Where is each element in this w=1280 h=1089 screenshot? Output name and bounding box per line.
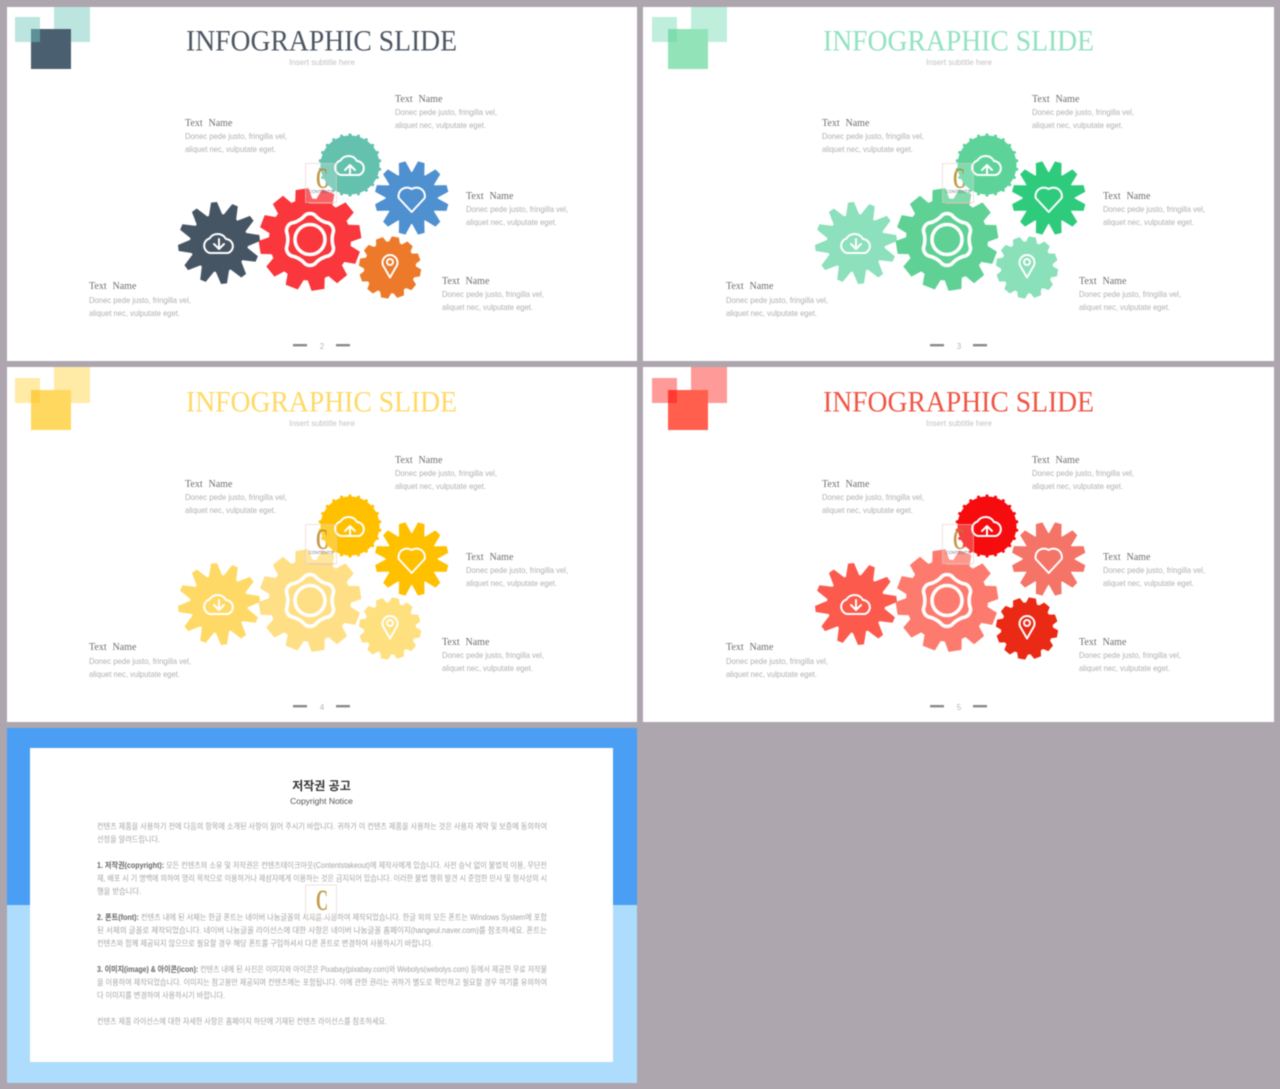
text block: top right: aliquet nec, vulputate eget. (1032, 120, 1123, 130)
text block: top right (1032, 455, 1134, 491)
text block: lower right (442, 637, 544, 673)
text block: top left: Donec pede justo, fringilla vel, (822, 131, 924, 141)
notice section 3: 3. 이미지(image) & 아이콘(icon): 컨텐츠 내에 된 사진은 이미지와 아이콘은 Pixabay(pixabay.com)와 Webolys(webolys.com) 등에서 제공한 무료 저작물 (97, 964, 547, 974)
notice heading: 저작권 공고 (292, 778, 351, 793)
text block: lower right: Donec pede justo, fringilla vel, (1079, 289, 1181, 299)
notice section 3: 을 이용하여 제작되었습니다. 이미지는 참고용만 제공되며 컨텐츠에는 포함됩니다. 이에 관한 권리는 귀하가 별도로 확인하고 필요할 경우 여기를 유의하여 (97, 977, 547, 987)
gear: download (173, 558, 265, 650)
watermark: C (953, 162, 965, 195)
text block: top right: Text Name (1032, 94, 1080, 105)
subtitle: Insert subtitle here (926, 419, 992, 428)
text block: top right (1032, 94, 1134, 130)
text block: lower left (89, 281, 191, 318)
text block: lower left: Text Name (726, 642, 774, 653)
text block: right: aliquet nec, vulputate eget. (1103, 578, 1194, 588)
text block: top left: Text Name (822, 479, 870, 490)
text block: top left: Donec pede justo, fringilla vel, (822, 492, 924, 502)
text block: right: Donec pede justo, fringilla vel, (466, 204, 568, 214)
text block: lower right: aliquet nec, vulputate eget. (442, 663, 533, 673)
text block: right: Donec pede justo, fringilla vel, (1103, 565, 1205, 575)
gear: upload (956, 494, 1018, 558)
panel: slide 3 green theme (643, 7, 1274, 361)
gear: settings (252, 542, 368, 659)
subtitle: Insert subtitle here (289, 58, 355, 67)
watermark (942, 162, 974, 204)
text block: right: Text Name (1103, 552, 1151, 563)
watermark: C (316, 162, 328, 195)
gear: pin (991, 232, 1063, 303)
text block: lower left: Donec pede justo, fringilla vel, (89, 295, 191, 305)
text block: right (466, 191, 568, 227)
text block: top left: Donec pede justo, fringilla vel, (185, 131, 287, 141)
gear: heart (366, 153, 457, 243)
text block: right: aliquet nec, vulputate eget. (466, 578, 557, 588)
notice section 1 (97, 860, 547, 896)
title: INFOGRAPHIC SLIDE (823, 386, 1094, 418)
gear: heart (366, 514, 457, 604)
watermark: CONTENTS (309, 550, 333, 555)
text block: top left (822, 118, 924, 154)
text block: top left: aliquet nec, vulputate eget. (822, 144, 913, 154)
notice intro (97, 821, 547, 844)
text block: lower right: aliquet nec, vulputate eget. (1079, 302, 1170, 312)
notice section 1: 재, 배포 시 기 명백에 의하여 영리 목적으로 이용하거나 제삼자에게 이용하는 것은 금지되어 있습니다. 이러한 불법 행위 발견 시 준엄한 민사 및 형사상의 시 (97, 873, 547, 883)
text block: right: Donec pede justo, fringilla vel, (1103, 204, 1205, 214)
text block: top right: Donec pede justo, fringilla vel, (1032, 468, 1134, 478)
pagination: 3 (957, 342, 962, 351)
gear: upload (319, 494, 381, 558)
text block: right (1103, 552, 1205, 588)
text block: top right: Donec pede justo, fringilla vel, (395, 468, 497, 478)
gear: heart (1003, 514, 1094, 604)
pagination (930, 703, 987, 712)
notice footer: 컨텐츠 제품 라이선스에 대한 자세한 사항은 홈페이지 하단에 기재된 컨텐츠 라이선스를 참조하세요. (97, 1016, 387, 1026)
text block: lower right: Donec pede justo, fringilla vel, (442, 289, 544, 299)
watermark (306, 884, 336, 919)
pagination (293, 703, 350, 712)
text block: lower right: aliquet nec, vulputate eget. (1079, 663, 1170, 673)
watermark: CONTENTS (309, 189, 333, 194)
watermark: CONTENTS (946, 189, 970, 194)
title: INFOGRAPHIC SLIDE (823, 24, 1094, 58)
text block: top left: Text Name (822, 118, 870, 129)
notice section 1: 1. 저작권(copyright): 모든 컨텐츠의 소유 및 저작권은 컨텐츠테이크아웃(Contentstakeout)에 제작사에게 있습니다. 사전 승낙 없이 불법적 이용, 무단전 (97, 860, 547, 870)
text block: lower right (1079, 276, 1181, 312)
gear: upload (319, 134, 381, 196)
text block: top right: aliquet nec, vulputate eget. (395, 481, 486, 491)
text block: top right: Text Name (1032, 455, 1080, 466)
text block: lower right: Text Name (1079, 276, 1127, 287)
text block: top right: aliquet nec, vulputate eget. (395, 120, 486, 130)
text block: lower left: Text Name (89, 281, 137, 292)
watermark (306, 162, 336, 204)
watermark: C (953, 523, 965, 556)
text block: lower right (442, 276, 544, 312)
text block: top left: aliquet nec, vulputate eget. (822, 505, 913, 515)
panel: slide 2 dark theme (7, 7, 637, 361)
pagination: 4 (320, 703, 325, 712)
notice section 2: 컨텐츠와 함께 제공되지 않으므로 필요할 경우 해당 폰트를 구입하셔서 다른 폰트로 변경하여 사용하시기 바랍니다. (97, 938, 433, 948)
notice intro: 컨텐츠 제품을 사용하기 전에 다음의 항목에 소개된 사항이 읽어 주시기 바랍니다. 귀하가 이 컨텐츠 제품을 사용하는 것은 사용자 계약 및 보증에 동의하여 (97, 821, 547, 831)
gear: settings (252, 181, 368, 298)
text block: lower left: aliquet nec, vulputate eget. (89, 308, 180, 318)
text block: top right: Donec pede justo, fringilla vel, (395, 107, 497, 117)
text block: lower right: Text Name (442, 276, 490, 287)
corner squares (15, 7, 90, 69)
text block: right: Text Name (466, 191, 514, 202)
watermark: C (316, 523, 328, 556)
text block: lower right: Text Name (1079, 637, 1127, 648)
text block: top left (185, 479, 287, 515)
watermark: C (316, 884, 328, 917)
text block: lower right: Donec pede justo, fringilla vel, (1079, 650, 1181, 660)
gear: pin (991, 593, 1063, 664)
notice section 2: 2. 폰트(font): 컨텐츠 내에 된 서체는 한글 폰트는 네이버 나눔글꼴의 서체를 사용하여 제작되었습니다. 한글 외의 모든 폰트는 Windows System에 포함 (97, 912, 548, 922)
text block: lower right: Text Name (442, 637, 490, 648)
corner squares (15, 367, 90, 430)
text block: top right: Text Name (395, 94, 443, 105)
text block: lower left: Donec pede justo, fringilla vel, (726, 295, 828, 305)
text block: right: Donec pede justo, fringilla vel, (466, 565, 568, 575)
text block: lower left (89, 642, 191, 679)
text block: lower left: aliquet nec, vulputate eget. (726, 308, 817, 318)
panel: slide 4 yellow theme (7, 367, 637, 722)
text block: top left (185, 118, 287, 154)
gear: settings (889, 181, 1005, 298)
text block: lower left: aliquet nec, vulputate eget. (726, 669, 817, 679)
text block: lower left: Donec pede justo, fringilla vel, (726, 656, 828, 666)
text block: lower right (1079, 637, 1181, 673)
gear: upload (956, 134, 1018, 196)
text block: lower left (726, 281, 828, 318)
pagination (293, 342, 350, 351)
pagination: 5 (957, 703, 962, 712)
notice section 3 (97, 964, 547, 1000)
text block: top right: aliquet nec, vulputate eget. (1032, 481, 1123, 491)
subtitle: Insert subtitle here (926, 58, 992, 67)
text block: lower left: Text Name (89, 642, 137, 653)
text block: right (1103, 191, 1205, 227)
text block: top right (395, 94, 497, 130)
text block: top left: aliquet nec, vulputate eget. (185, 144, 276, 154)
text block: right: aliquet nec, vulputate eget. (466, 217, 557, 227)
text block: right: Text Name (466, 552, 514, 563)
text block: right: aliquet nec, vulputate eget. (1103, 217, 1194, 227)
notice section 2: 된 서체의 글꼴로 제작되었습니다. 네이버 나눔글꼴 라이선스에 대한 사항은 네이버 나눔글꼴 홈페이지(hangeul.naver.com)를 참조하세요. 폰트는 (97, 925, 547, 935)
text block: top left: Donec pede justo, fringilla vel, (185, 492, 287, 502)
text block: top right: Donec pede justo, fringilla vel, (1032, 107, 1134, 117)
text block: right: Text Name (1103, 191, 1151, 202)
text block: top left: Text Name (185, 118, 233, 129)
text block: top left: aliquet nec, vulputate eget. (185, 505, 276, 515)
text block: lower right: Donec pede justo, fringilla vel, (442, 650, 544, 660)
gear: pin (354, 593, 426, 664)
gear: pin (354, 232, 426, 303)
text block: lower left: Donec pede justo, fringilla vel, (89, 656, 191, 666)
notice section 3: 다 이미지를 변경하여 사용하시기 바랍니다. (97, 990, 225, 1000)
gear: download (810, 558, 902, 650)
gear: heart (1003, 153, 1094, 243)
text block: lower left: aliquet nec, vulputate eget. (89, 669, 180, 679)
panel: copyright notice (7, 728, 637, 1083)
corner squares (652, 367, 727, 430)
corner squares (652, 7, 727, 69)
text block: lower right: aliquet nec, vulputate eget. (442, 302, 533, 312)
subtitle: Insert subtitle here (289, 419, 355, 428)
panel: slide 5 red theme (643, 367, 1274, 722)
pagination (930, 342, 987, 351)
text block: top right: Text Name (395, 455, 443, 466)
text block: top left: Text Name (185, 479, 233, 490)
notice subheading: Copyright Notice (290, 796, 353, 806)
gear: download (173, 197, 265, 289)
pagination: 2 (320, 342, 325, 351)
text block: top right (395, 455, 497, 491)
notice intro: 선정을 알려드립니다. (97, 834, 160, 844)
text block: right (466, 552, 568, 588)
text block: lower left (726, 642, 828, 679)
title: INFOGRAPHIC SLIDE (186, 386, 457, 418)
gear: settings (889, 542, 1005, 659)
watermark (306, 523, 336, 565)
gear: download (810, 197, 902, 289)
text block: top left (822, 479, 924, 515)
title: INFOGRAPHIC SLIDE (186, 24, 457, 58)
text block: lower left: Text Name (726, 281, 774, 292)
notice section 2 (97, 912, 548, 948)
notice section 1: 행을 받습니다. (97, 886, 141, 896)
watermark: CONTENTS (946, 550, 970, 555)
watermark (942, 523, 974, 565)
